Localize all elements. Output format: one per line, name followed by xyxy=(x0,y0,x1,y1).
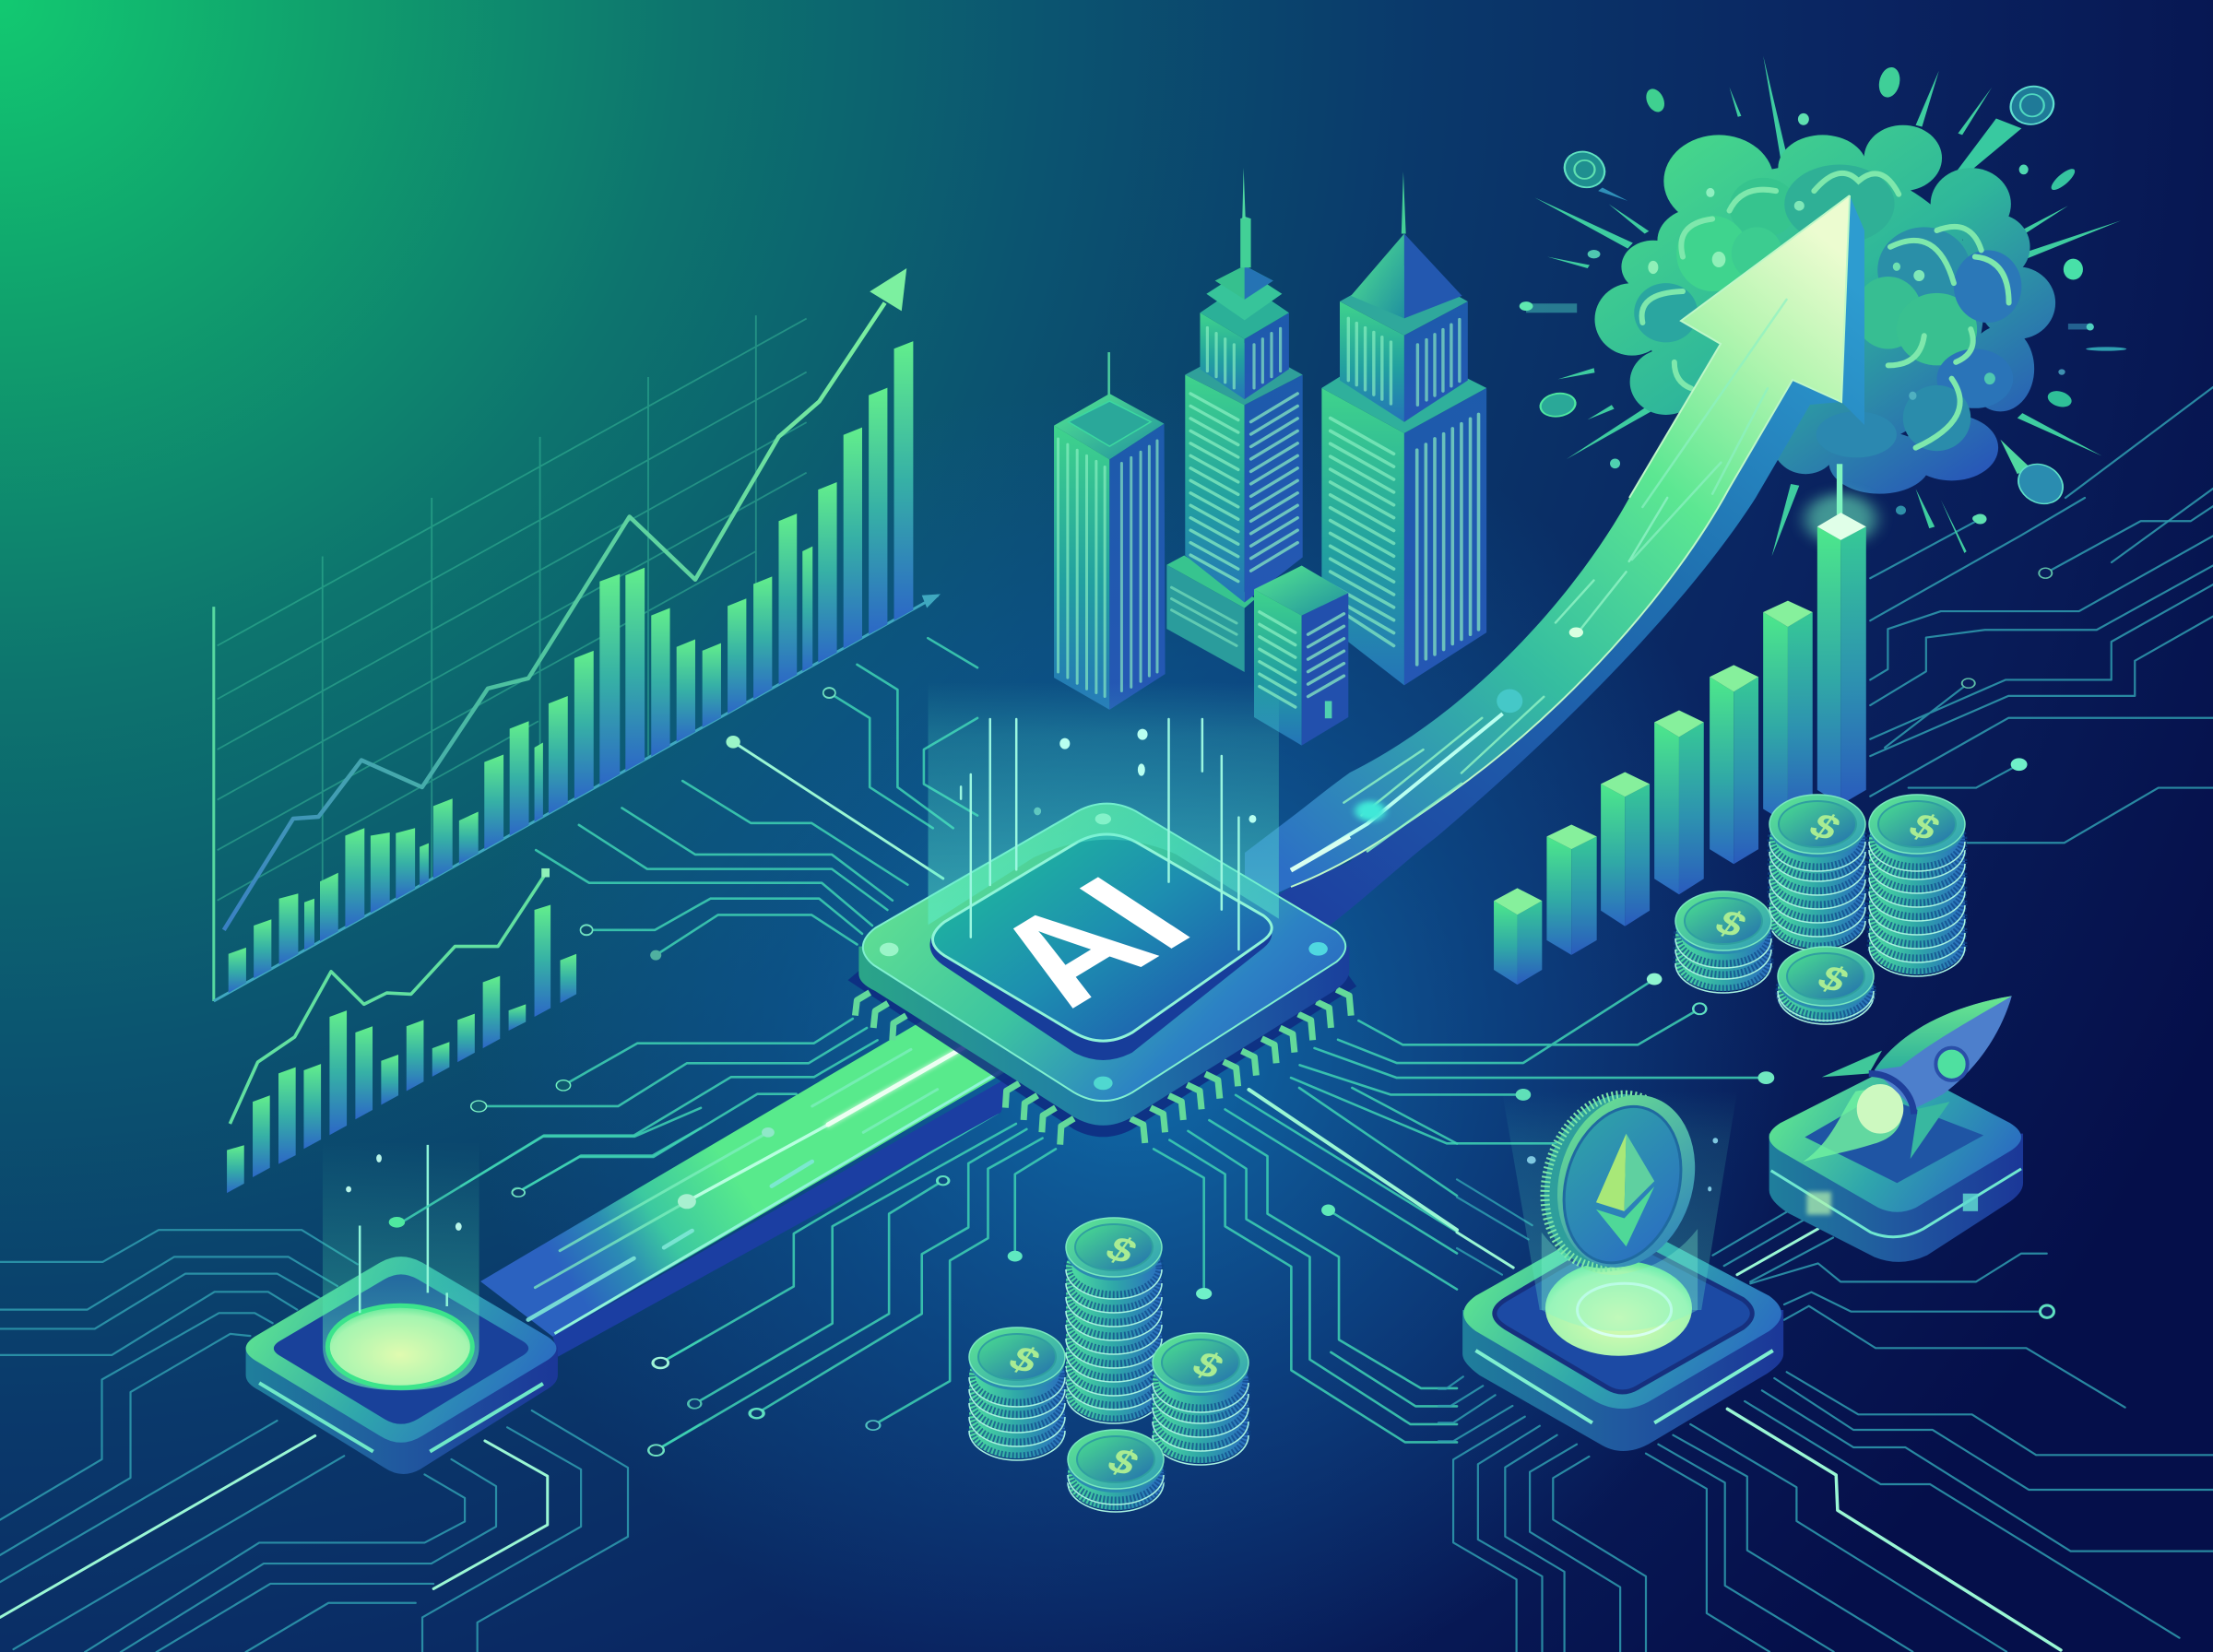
coin stack A xyxy=(1066,1218,1162,1423)
light beam xyxy=(323,1141,479,1390)
beam volume xyxy=(929,682,1279,925)
particles xyxy=(1034,729,1256,823)
hologram overlay xyxy=(1542,1229,1698,1331)
chart trend line with arrow xyxy=(224,268,906,930)
skyscrapers xyxy=(1054,168,1486,746)
chip shadow xyxy=(848,959,1356,1137)
small chart trend line xyxy=(230,868,550,1124)
coin stacks: upper right xyxy=(1675,795,1965,1024)
rocket flame core xyxy=(1857,1084,1903,1134)
explosion spikes xyxy=(1534,56,2121,557)
rocket band xyxy=(1869,1074,1914,1115)
isometric bar chart xyxy=(1494,464,1876,985)
beam streaks xyxy=(961,719,1238,950)
pad inner well xyxy=(274,1274,528,1424)
circuit traces: right of chip xyxy=(1291,498,2213,1143)
big growth arrow xyxy=(1236,195,1864,940)
road edge highlight xyxy=(554,1071,1001,1334)
coin stack 1 xyxy=(1769,795,1865,950)
coin stack 2: $ xyxy=(1900,806,1948,848)
bar 5 xyxy=(1710,665,1758,864)
glowing road from pad to chip xyxy=(480,1021,1012,1357)
explosion cloud xyxy=(1520,56,2126,557)
circuit traces: below chip xyxy=(649,1088,1457,1456)
rocket lower fin xyxy=(1911,1102,1949,1159)
chip body side xyxy=(858,947,1349,1126)
road top xyxy=(480,1021,1004,1337)
circuit traces: around Ethereum platform xyxy=(1457,1179,2047,1283)
coin stacks: bottom centre xyxy=(969,1218,1249,1512)
rocket fins xyxy=(1822,1051,1882,1077)
arrow edge highlight xyxy=(1291,195,1850,887)
glowing disc xyxy=(327,1305,472,1387)
disc ring xyxy=(1578,1283,1672,1337)
bar 3 xyxy=(1601,773,1650,926)
rocket flame xyxy=(1803,1090,1901,1162)
bar 7 glow xyxy=(1805,493,1876,545)
chart bars xyxy=(229,341,913,993)
AI label: AI xyxy=(948,853,1227,1029)
platform slots xyxy=(1475,1351,1773,1422)
Ethereum coin xyxy=(1525,1080,1714,1282)
rocket body highlight xyxy=(1875,996,2012,1070)
coin stack A: $ xyxy=(1097,1229,1145,1271)
bar 6 xyxy=(1763,601,1813,824)
Ethereum coin platform xyxy=(1462,1080,1783,1451)
coin stack B: $ xyxy=(1000,1339,1048,1381)
chip inner plate xyxy=(932,834,1272,1041)
building: middle stepped tower xyxy=(1166,168,1303,672)
arrow streaks xyxy=(1291,498,1667,870)
pad body xyxy=(246,1347,558,1474)
coin stack B xyxy=(969,1328,1065,1460)
arrow top face xyxy=(1245,195,1850,908)
main bar and line chart xyxy=(214,268,941,1001)
coin stack 2 xyxy=(1869,795,1965,976)
chip hologram beam xyxy=(929,682,1279,950)
bar 1 xyxy=(1494,888,1542,985)
cloud inner puffs xyxy=(1634,165,2021,457)
coin stack C: $ xyxy=(1184,1344,1232,1386)
arrow side face xyxy=(1236,195,1864,940)
beam dots and road traces xyxy=(389,1108,701,1456)
coin stack 4: $ xyxy=(1809,958,1857,1000)
coin stack C xyxy=(1153,1333,1249,1465)
rocket body xyxy=(1875,996,2012,1109)
platform side xyxy=(1462,1310,1783,1451)
flying coins and debris xyxy=(1520,66,2126,523)
beam particles xyxy=(346,1154,462,1231)
pad top xyxy=(246,1257,556,1443)
coin stack 3 xyxy=(1675,891,1771,993)
coin stack 3: $ xyxy=(1707,903,1755,945)
platform well xyxy=(1495,1239,1752,1392)
bar 7 xyxy=(1817,513,1866,805)
rocket pad lines and lights xyxy=(1771,1169,2021,1237)
left emitter pad xyxy=(246,1108,701,1474)
cloud blobs xyxy=(1594,125,2055,494)
beam streaks xyxy=(360,1145,447,1313)
AI chip xyxy=(848,804,1356,1145)
rocket pad side xyxy=(1769,1134,2023,1262)
coin stack 4 xyxy=(1778,947,1874,1024)
small chart bars xyxy=(227,905,576,1193)
building: right pyramid tower xyxy=(1321,171,1486,685)
chart axes xyxy=(214,594,941,1001)
coin stack 1: $ xyxy=(1801,806,1849,848)
rocket pad window xyxy=(1805,1095,1983,1183)
building: left tower xyxy=(1054,352,1166,710)
small bar and line chart xyxy=(227,868,576,1193)
chip top face xyxy=(863,804,1345,1101)
bar 2 xyxy=(1546,825,1597,955)
road light streaks xyxy=(528,1046,965,1320)
coin stack D xyxy=(1068,1430,1164,1512)
rocket on platform xyxy=(1769,996,2023,1262)
pad slots xyxy=(259,1383,543,1452)
chip inner plate shadow xyxy=(930,837,1272,1060)
circuit traces: lower left around pad xyxy=(0,1230,701,1652)
circuit traces: top right and far right xyxy=(2065,387,2213,562)
chip corner screws xyxy=(880,813,1328,1090)
circuit traces: left of chip xyxy=(536,638,977,961)
building: small front block xyxy=(1254,566,1348,746)
platform top xyxy=(1463,1223,1781,1409)
hologram cone xyxy=(1502,1092,1737,1310)
circuit traces: lower right xyxy=(1438,1292,2213,1652)
circuit traces: between chart and road xyxy=(461,1019,878,1197)
chart grid xyxy=(218,315,807,938)
coin stack D: $ xyxy=(1099,1441,1147,1483)
road dark side xyxy=(553,1076,1012,1357)
bar 7 streak xyxy=(1837,464,1842,514)
rocket pad top xyxy=(1769,1070,2021,1212)
chip pins xyxy=(855,989,1351,1145)
rocket window xyxy=(1935,1048,1968,1080)
glowing disc xyxy=(1545,1260,1692,1356)
bar 4 xyxy=(1654,711,1704,894)
particles xyxy=(1527,1138,1718,1191)
